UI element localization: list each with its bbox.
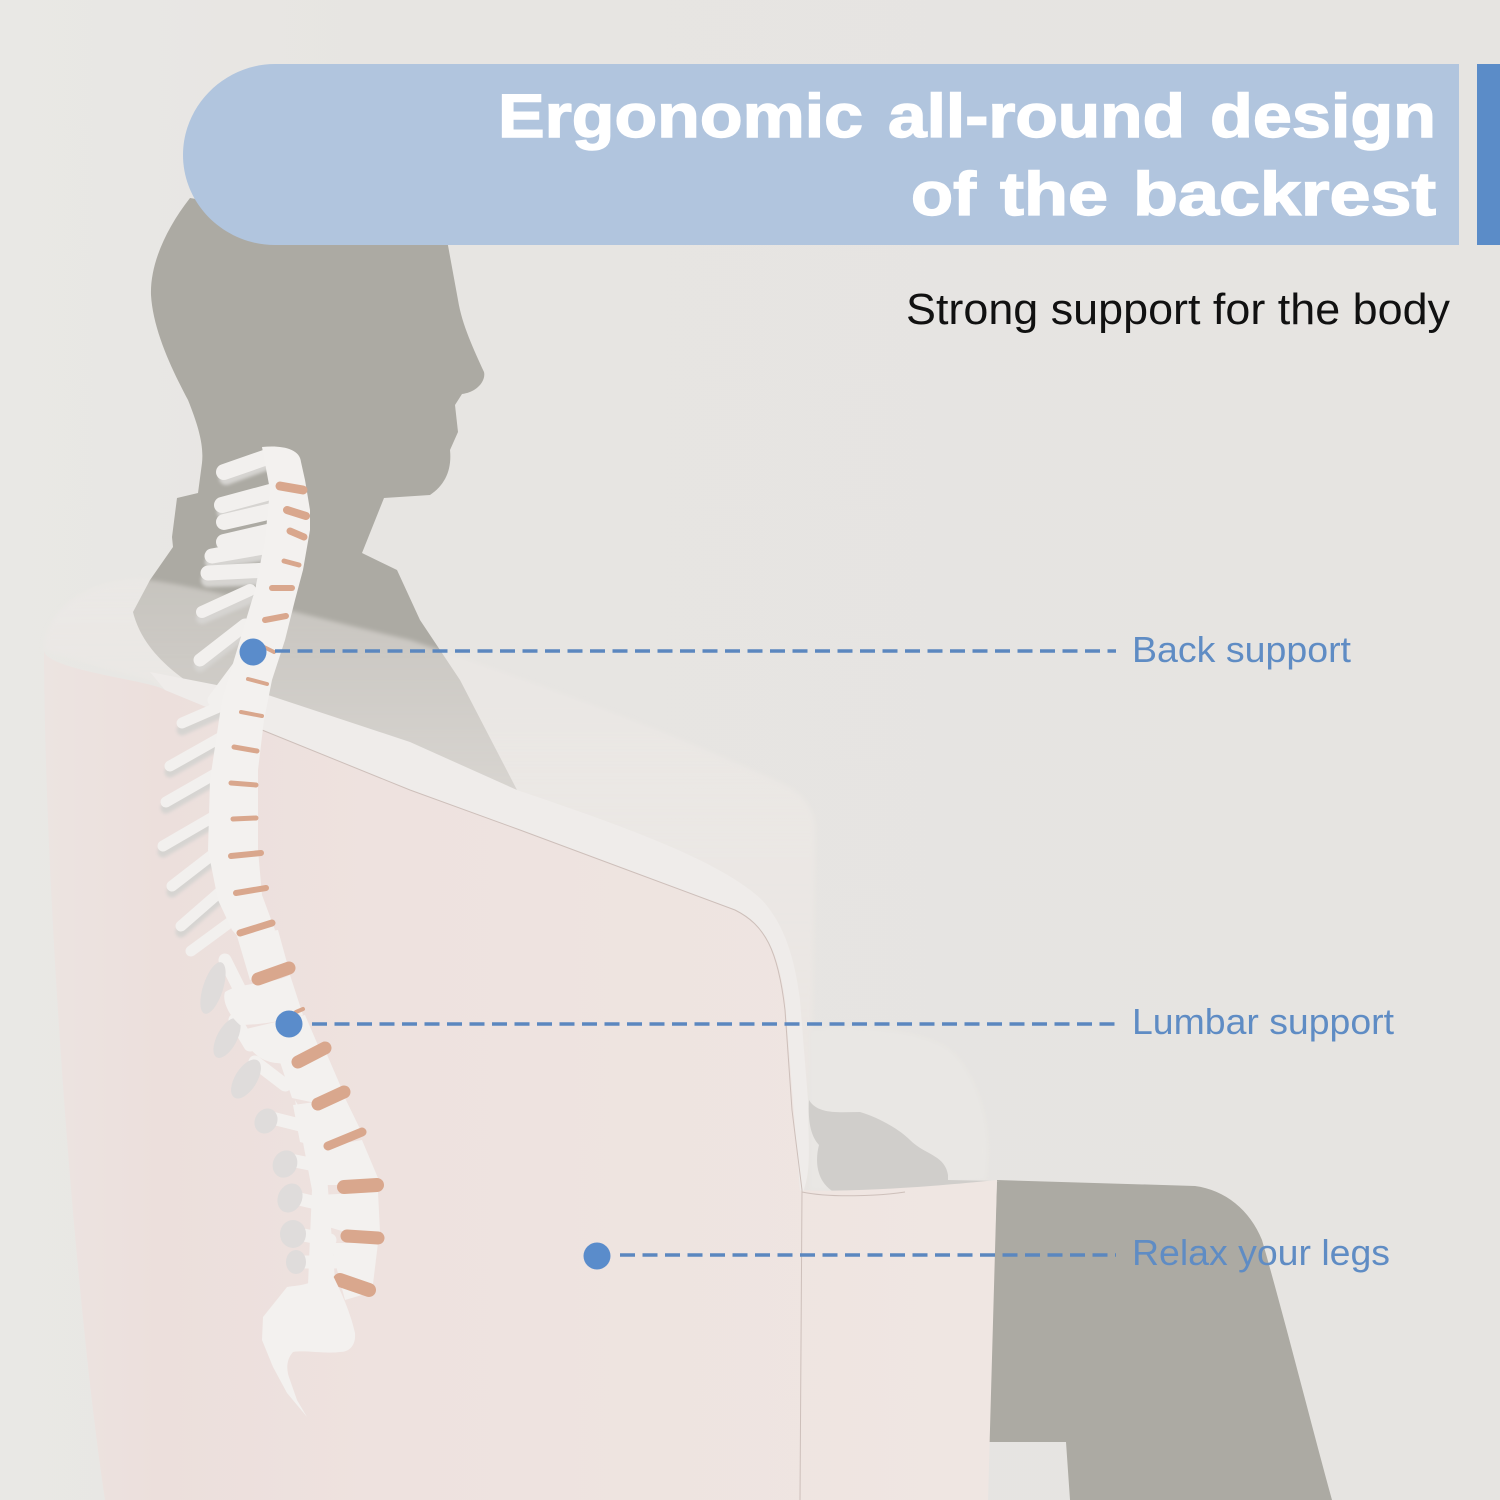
callout: lumbar support [276,1001,1394,1042]
chair: rim highlight [150,672,809,1192]
heading: of [911,160,977,228]
chair: hand resting on arm [809,1100,1000,1195]
callout: lumbar support: Lumbar support [1132,1001,1394,1042]
callout: back support: Back support [1132,629,1351,670]
chair: upper rim and back [44,579,815,1192]
heading: backrest [1133,160,1436,228]
spine: lumbar spinous lobes [195,959,307,1274]
spine: cervical and thoracic column [208,446,310,950]
silhouette: legs [988,1180,1332,1500]
header banner [183,64,1459,245]
callout: back support [240,629,1351,670]
callout: relax your legs: Relax your legs [1132,1232,1390,1273]
spine: lumbar vertebrae [224,930,380,1300]
chair: pale arm [810,1028,987,1190]
heading: the [1000,160,1108,228]
callout: relax your legs [584,1232,1390,1273]
heading: Ergonomic [498,82,863,150]
spine: process shadows [163,462,285,932]
armchair [44,579,1000,1500]
spine: sacrum and tailbone [262,1270,355,1417]
spine: intervertebral discs [231,486,378,1290]
heading: design [1210,82,1436,150]
spine: lumbar connectors [225,960,335,1262]
heading: all-round [888,82,1185,150]
spine: transverse processes [163,456,285,951]
subheading: Strong support for the body [906,285,1450,334]
heading [498,82,1436,228]
spine model [163,446,380,1417]
header accent bar [1477,64,1500,245]
chair: seam lines [262,730,905,1500]
silhouette: seated person head and torso [133,198,517,790]
chair: pink front panel [44,650,997,1500]
